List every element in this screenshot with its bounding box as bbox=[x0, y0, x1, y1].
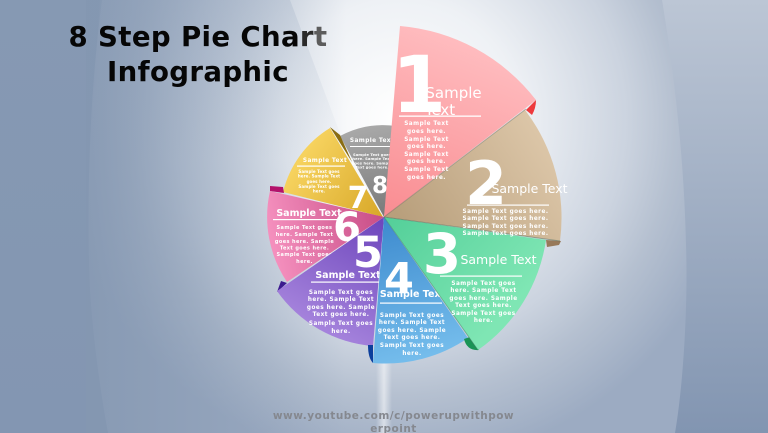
segment 7: yellow: Sample Text goes bbox=[298, 169, 340, 174]
segment 8: grey: 8 bbox=[372, 173, 388, 199]
segment 1: red: goes here. bbox=[407, 175, 446, 181]
segment 1: red: goes here. bbox=[407, 159, 446, 165]
segment 1: red: 1 bbox=[392, 41, 446, 131]
segment 5: purple: Text goes here. bbox=[313, 312, 369, 318]
pie chart bbox=[267, 26, 568, 364]
segment 1: red: goes here. bbox=[407, 129, 446, 135]
segment 5: purple bbox=[277, 217, 384, 346]
segment 8: grey: Text goes here. bbox=[355, 166, 389, 170]
title: 8 Step Pie Chart bbox=[69, 20, 327, 53]
segment 1: red: Sample bbox=[425, 84, 482, 102]
segment 2: tan: 2 bbox=[465, 149, 507, 219]
segment 4: blue bbox=[368, 217, 468, 364]
segment 5: purple: here. Sample Text bbox=[308, 297, 374, 303]
segment 3: green: Sample Text goes bbox=[451, 281, 516, 287]
segment 4: blue: Sample Text goes bbox=[380, 313, 444, 319]
segment 7: yellow: 7 bbox=[348, 181, 368, 216]
segment 3: green: Sample Text goes bbox=[451, 311, 516, 317]
segment 3: green: 3 bbox=[423, 222, 461, 286]
segment 8: grey: Sample Text goes bbox=[353, 153, 392, 157]
segment 2: tan: Sample Text goes here. bbox=[462, 216, 548, 222]
segment 8: grey: Sample Text bbox=[350, 138, 394, 144]
segment 3: green: goes here. Sample bbox=[449, 296, 518, 302]
segment 5: purple: goes here. Sample bbox=[307, 305, 375, 311]
segment 6: pink: Text goes here. bbox=[280, 246, 329, 252]
segment 7: yellow bbox=[283, 127, 383, 217]
segment 6: pink: Sample Text goes bbox=[277, 252, 332, 258]
segment 3: green bbox=[384, 217, 546, 350]
segment 4: blue: Text goes here. bbox=[384, 335, 440, 341]
segment 5: purple: 5 bbox=[353, 228, 383, 278]
segment 3: green: here. bbox=[474, 318, 493, 324]
segment 1: red: Sample Text bbox=[404, 137, 449, 143]
segment 6: pink: here. Sample Text bbox=[276, 232, 334, 238]
segment 1: red: Text bbox=[424, 101, 455, 119]
segment 6: pink: goes here. Sample bbox=[275, 239, 334, 245]
segment 6: pink: here. bbox=[296, 259, 313, 265]
segment 6: pink: Sample Text goes bbox=[277, 225, 332, 231]
segment 6: pink bbox=[267, 186, 384, 282]
segment 5: purple: Sample Text goes bbox=[309, 321, 373, 327]
segment 1: red: goes here. bbox=[407, 144, 446, 150]
segment 8: grey: goes here. Sample bbox=[352, 162, 393, 166]
segment 4: blue: here. bbox=[402, 351, 422, 357]
segment 5: purple: Sample Text goes bbox=[309, 290, 373, 296]
segment 4: blue: here. Sample Text bbox=[379, 320, 445, 326]
segment 4: blue: Sample Text goes bbox=[380, 343, 444, 349]
segment 8: grey bbox=[340, 125, 396, 217]
segment 6: pink: 6 bbox=[333, 205, 361, 251]
segment 1: red: Sample Text bbox=[404, 152, 449, 158]
segment 2: tan: Sample Text bbox=[491, 181, 568, 196]
segment 5: purple: here. bbox=[331, 329, 351, 335]
segment 2: tan bbox=[384, 110, 568, 247]
segment 5: purple: Sample Text bbox=[315, 270, 381, 281]
footer url bbox=[273, 410, 514, 433]
segment 7: yellow: Sample Text goes bbox=[298, 184, 340, 189]
segment 7: yellow: goes here. bbox=[307, 179, 332, 184]
segment 8: grey: here. Sample Text bbox=[352, 157, 392, 161]
segment 4: blue: goes here. Sample bbox=[378, 328, 446, 334]
segment 1: red: Sample Text bbox=[404, 121, 449, 127]
segment 7: yellow: here. bbox=[313, 188, 326, 194]
segment 1: red: Sample Text bbox=[404, 167, 449, 173]
title bbox=[69, 20, 327, 88]
segment 4: blue: Sample Text bbox=[380, 289, 446, 300]
segment 1: red bbox=[384, 26, 536, 217]
segment 3: green: here. Sample Text bbox=[450, 288, 517, 294]
segment 3: green: Sample Text bbox=[460, 252, 537, 267]
segment 6: pink: Sample Text bbox=[276, 208, 342, 219]
segment 2: tan: Sample Text goes here. bbox=[462, 231, 548, 237]
segment 2: tan: Sample Text goes here. bbox=[462, 209, 548, 215]
segment 3: green: Text goes here. bbox=[455, 303, 512, 309]
segment 7: yellow: here. Sample Text bbox=[298, 174, 340, 178]
segment 7: yellow: Sample Text bbox=[303, 158, 347, 164]
segment 2: tan: Sample Text goes here. bbox=[462, 224, 548, 230]
footer url: www.youtube.com/c/powerupwithpow bbox=[273, 410, 514, 422]
segment 4: blue: 4 bbox=[384, 254, 414, 304]
title: Infographic bbox=[107, 55, 289, 88]
